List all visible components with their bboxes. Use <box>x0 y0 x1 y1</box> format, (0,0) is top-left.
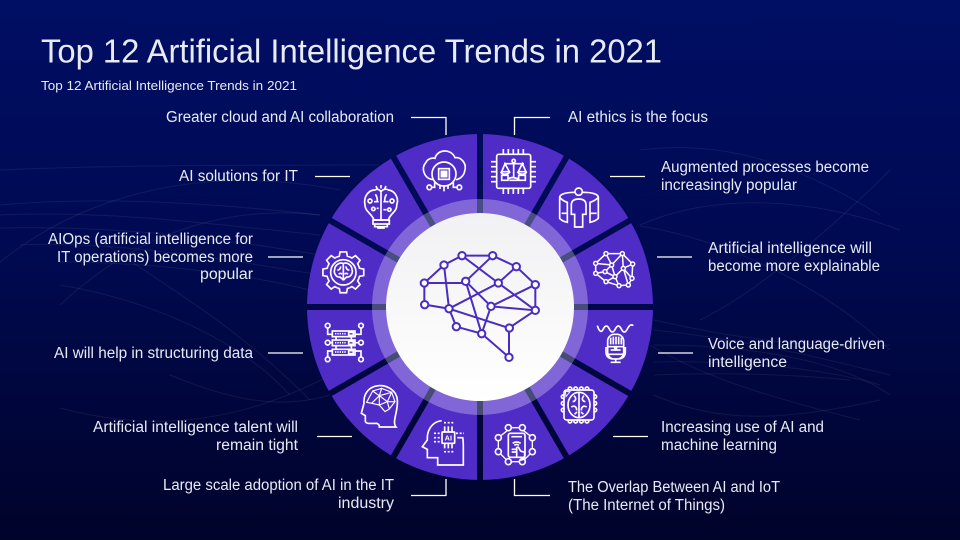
icon: phone IoT network <box>495 425 535 465</box>
label: Augmented processes: increasingly popular <box>661 177 797 194</box>
label: Augmented processes: Augmented processes become <box>661 159 869 176</box>
label: AI ethics is the focus: AI ethics is the focus <box>568 109 708 126</box>
icon: microphone waveform <box>597 325 633 362</box>
label: Increasing use of AI: Increasing use of AI and <box>661 419 824 436</box>
icon: cloud chip <box>423 151 465 191</box>
icon: gear brain <box>323 252 364 293</box>
label: AI solutions for IT: AI solutions for IT <box>179 168 299 185</box>
label: Greater cloud and AI collaboration: Greater cloud and AI collaboration <box>166 109 394 126</box>
title: Top 12 Artificial Intelligence Trends in 2021 <box>41 32 662 70</box>
icon: ethics scales chip <box>491 149 536 194</box>
label: Large scale adoption: industry <box>338 495 394 512</box>
label: Voice and language-driven intelligence: Voice and language-driven <box>708 336 885 353</box>
label: Augmented processes <box>661 159 869 194</box>
icon: brain bulb <box>365 185 397 228</box>
label: AI talent <box>93 419 299 454</box>
label: explainable AI: Artificial intelligence will <box>708 240 872 257</box>
label: AIOps: AIOps (artificial intelligence for <box>48 231 253 248</box>
icon: AI head <box>422 421 464 465</box>
icon: neural mesh <box>594 252 635 288</box>
label: AI will help in structuring data: AI will help in structuring data <box>54 345 253 362</box>
label: Increasing use of AI <box>661 419 824 454</box>
label: AI and IoT overlap: (The Internet of Things) <box>568 497 725 514</box>
icon: brain chip <box>561 387 597 423</box>
label: AI and IoT overlap: The Overlap Between AI and IoT <box>568 479 780 496</box>
label: explainable AI <box>708 240 880 275</box>
label: Large scale adoption <box>163 477 395 512</box>
label: Large scale adoption: Large scale adoption of AI in the IT <box>163 477 395 494</box>
hub: white centre disc <box>386 213 574 401</box>
label: AI talent: Artificial intelligence talent will <box>93 419 298 436</box>
label: Voice and language-driven intelligence: intelligence <box>708 354 787 371</box>
label: explainable AI: become more explainable <box>708 258 880 275</box>
label: Increasing use of AI: machine learning <box>661 437 777 454</box>
connector lines <box>268 118 693 496</box>
hub: segmented purple wheel <box>307 134 653 480</box>
hub: translucent ring <box>372 199 588 415</box>
label: AIOps: IT operations) becomes more <box>57 249 253 266</box>
icon: central network brain <box>421 252 539 361</box>
label: AI and IoT overlap <box>568 479 780 514</box>
label: AIOps <box>48 231 253 283</box>
label: AIOps: popular <box>200 266 253 283</box>
label: Voice and language-driven intelligence <box>708 336 885 371</box>
label: AI talent: remain tight <box>216 437 299 454</box>
icon: person in cylinder <box>560 188 598 227</box>
icon: server network <box>325 323 363 362</box>
background wave lines <box>0 148 900 421</box>
icon: AI head: AI <box>445 433 452 442</box>
subtitle: Top 12 Artificial Intelligence Trends in 2021 <box>41 78 297 93</box>
icon: head with neural mesh <box>361 386 397 427</box>
